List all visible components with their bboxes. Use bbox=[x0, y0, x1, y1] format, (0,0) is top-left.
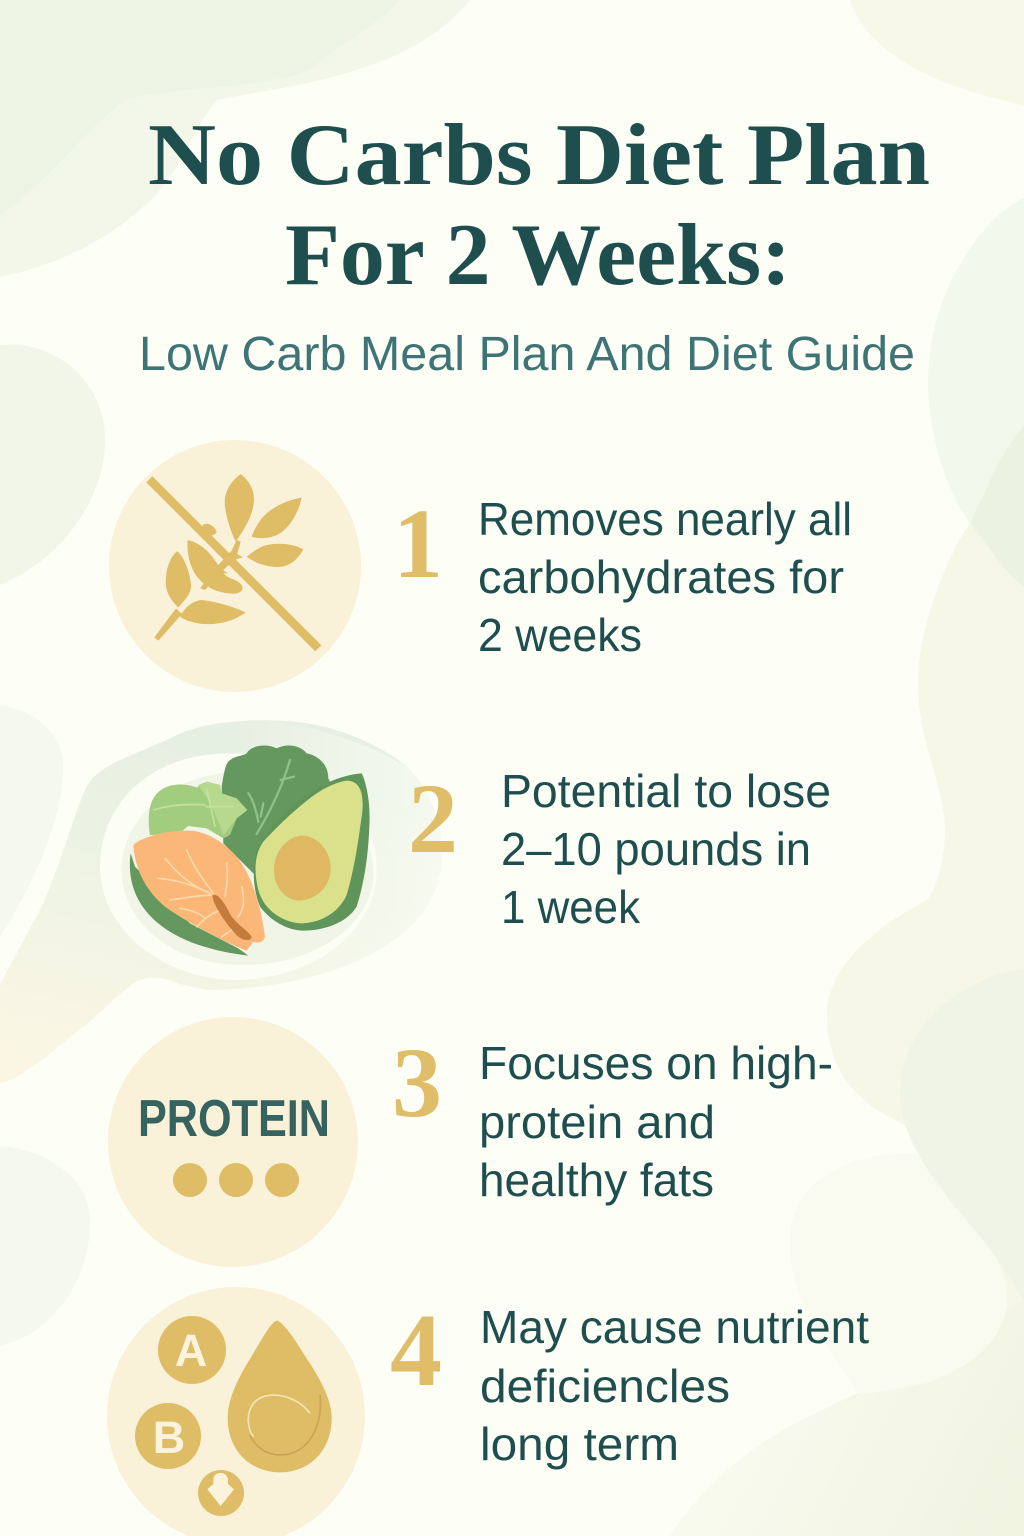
number 1: 1 bbox=[393, 488, 443, 599]
item 4: nutrient deficiencies bbox=[107, 1287, 869, 1536]
number 4: 4 bbox=[390, 1293, 442, 1408]
subtitle: Low Carb Meal Plan And Diet Guide bbox=[139, 328, 915, 381]
text 4: deficiencles bbox=[480, 1360, 730, 1412]
title: For 2 Weeks: bbox=[285, 207, 791, 304]
text 4: May cause nutrient bbox=[480, 1301, 869, 1353]
text 3: protein and bbox=[479, 1096, 715, 1148]
plate wash bbox=[0, 719, 442, 1083]
number 2: 2 bbox=[408, 763, 458, 874]
icon: vitamins and droplet: A bbox=[175, 1325, 207, 1376]
icon: vitamins and droplet: B bbox=[153, 1412, 185, 1463]
text 1: 2 weeks bbox=[478, 609, 642, 661]
text 2: 1 week bbox=[501, 881, 641, 933]
icon: crossed-out grain bbox=[109, 440, 361, 692]
icon: protein badge: PROTEIN bbox=[138, 1090, 330, 1148]
text 4 bbox=[480, 1301, 869, 1470]
text 3: Focuses on high- bbox=[479, 1037, 833, 1089]
text 2: 2–10 pounds in bbox=[501, 823, 811, 875]
number 3: 3 bbox=[392, 1027, 442, 1138]
icon: protein badge bbox=[108, 1017, 358, 1267]
item 3: protein and fats bbox=[108, 1017, 833, 1267]
text 4: long term bbox=[480, 1418, 679, 1470]
text 3 bbox=[479, 1037, 833, 1206]
text 2: Potential to lose bbox=[501, 765, 831, 817]
icon: plate of salmon, greens and avocado bbox=[100, 746, 377, 980]
text 3: healthy fats bbox=[479, 1154, 714, 1206]
item 2: weight loss bbox=[0, 719, 831, 1083]
title: No Carbs Diet Plan bbox=[148, 107, 930, 204]
text 1: carbohydrates for bbox=[478, 551, 844, 603]
icon: vitamins and droplet bbox=[107, 1287, 365, 1536]
item 1: remove carbohydrates bbox=[109, 440, 852, 692]
text 2 bbox=[501, 765, 831, 933]
title bbox=[148, 107, 930, 304]
text 1 bbox=[478, 493, 852, 661]
text 1: Removes nearly all bbox=[478, 493, 852, 545]
